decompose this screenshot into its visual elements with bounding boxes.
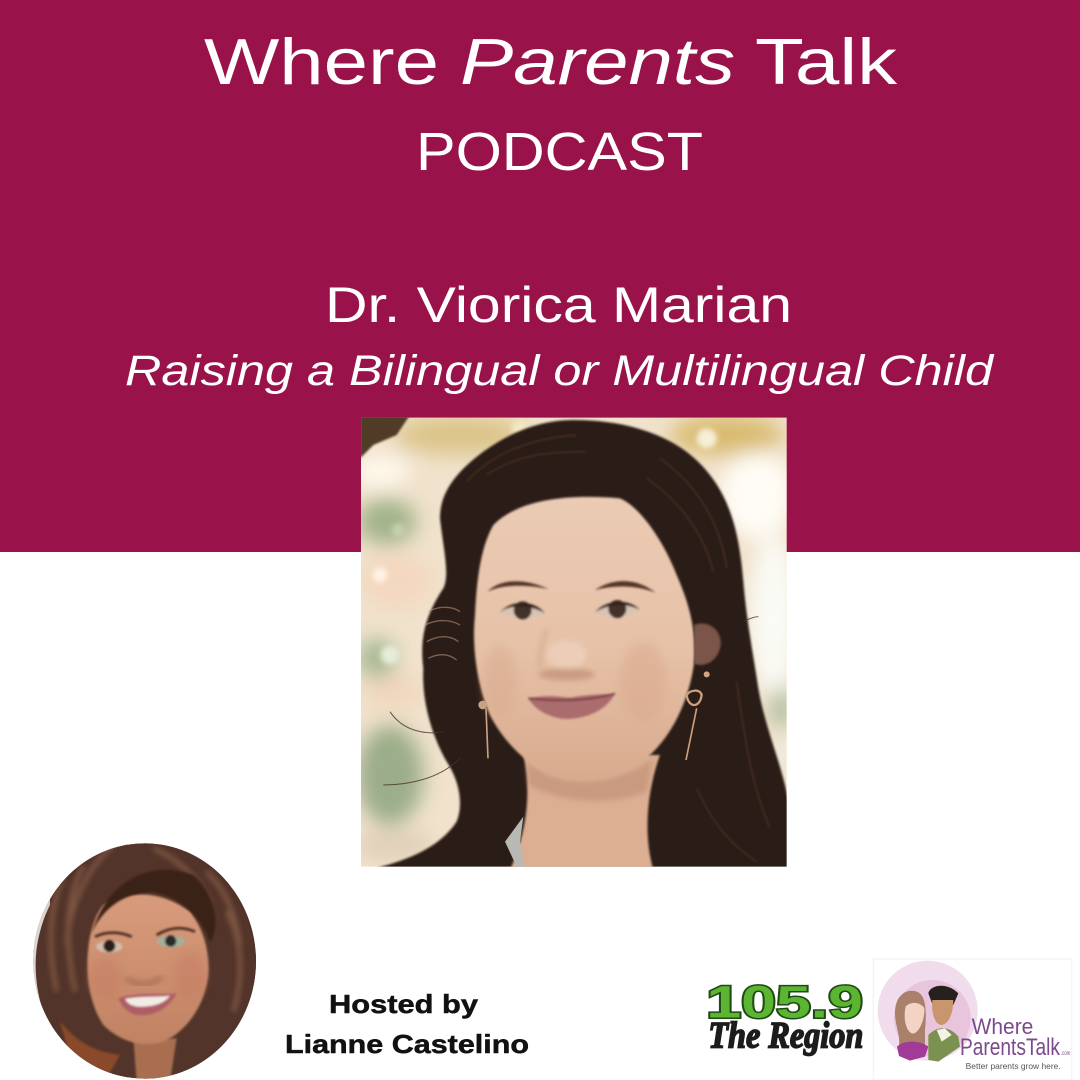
- hosted by credit: Lianne Castelino: [285, 1029, 529, 1059]
- hair: [370, 420, 788, 870]
- logo: 105.9 The Region: [706, 977, 863, 1056]
- guest name: Dr. Viorica Marian: [325, 277, 792, 333]
- earrings: [486, 691, 702, 760]
- man illustration: [928, 986, 958, 1007]
- nose shadow: [127, 977, 162, 984]
- logo: 105.9 The Region: 105.9: [706, 977, 863, 1028]
- collar: [505, 817, 525, 867]
- nose: [538, 628, 595, 680]
- eyebrows: [487, 581, 656, 593]
- pale wall at left edge: [34, 900, 50, 1022]
- maroon header panel: [0, 0, 1080, 552]
- episode title: Raising a Bilingual or Multilingual Child: [125, 347, 995, 395]
- eyebrows: [95, 928, 195, 937]
- dark fringe: [92, 870, 215, 942]
- cheek colour: [86, 962, 116, 990]
- title: Where Parents Talk: Where: [204, 25, 439, 98]
- neck: [510, 755, 660, 870]
- woman illustration: [895, 991, 926, 1050]
- title: Where Parents Talk: Talk: [755, 25, 898, 98]
- guest portrait photo: [350, 415, 797, 870]
- face: [87, 894, 209, 1044]
- subtitle: PODCAST: PODCAST: [416, 122, 703, 182]
- wordmark: Where: [972, 1014, 1033, 1039]
- neck: [133, 1038, 177, 1080]
- eyes: [96, 935, 185, 952]
- mouth: [528, 694, 615, 719]
- mouth: [118, 993, 177, 1015]
- pink circles: [878, 961, 978, 1061]
- host portrait circle: [30, 842, 257, 1080]
- hosted by credit: [285, 989, 529, 1059]
- cheek shading: [622, 643, 664, 708]
- hosted by credit: Hosted by: [329, 989, 479, 1019]
- tree trunk corner: [360, 415, 410, 458]
- logo: Where Parents Talk card: .com: [1061, 1051, 1070, 1057]
- face: [474, 497, 695, 780]
- eyes: [500, 600, 640, 619]
- hair: [36, 842, 257, 1080]
- logo: Where Parents Talk card: Better parents grow here.: [966, 1061, 1061, 1071]
- ear: [694, 624, 721, 665]
- title: Where Parents Talk: [204, 25, 898, 98]
- wispy curls at left: [425, 607, 460, 660]
- logo: 105.9 The Region: The Region: [708, 1015, 863, 1056]
- logo: Where Parents Talk card: [873, 959, 1072, 1080]
- title: Where Parents Talk: Parents: [460, 25, 735, 98]
